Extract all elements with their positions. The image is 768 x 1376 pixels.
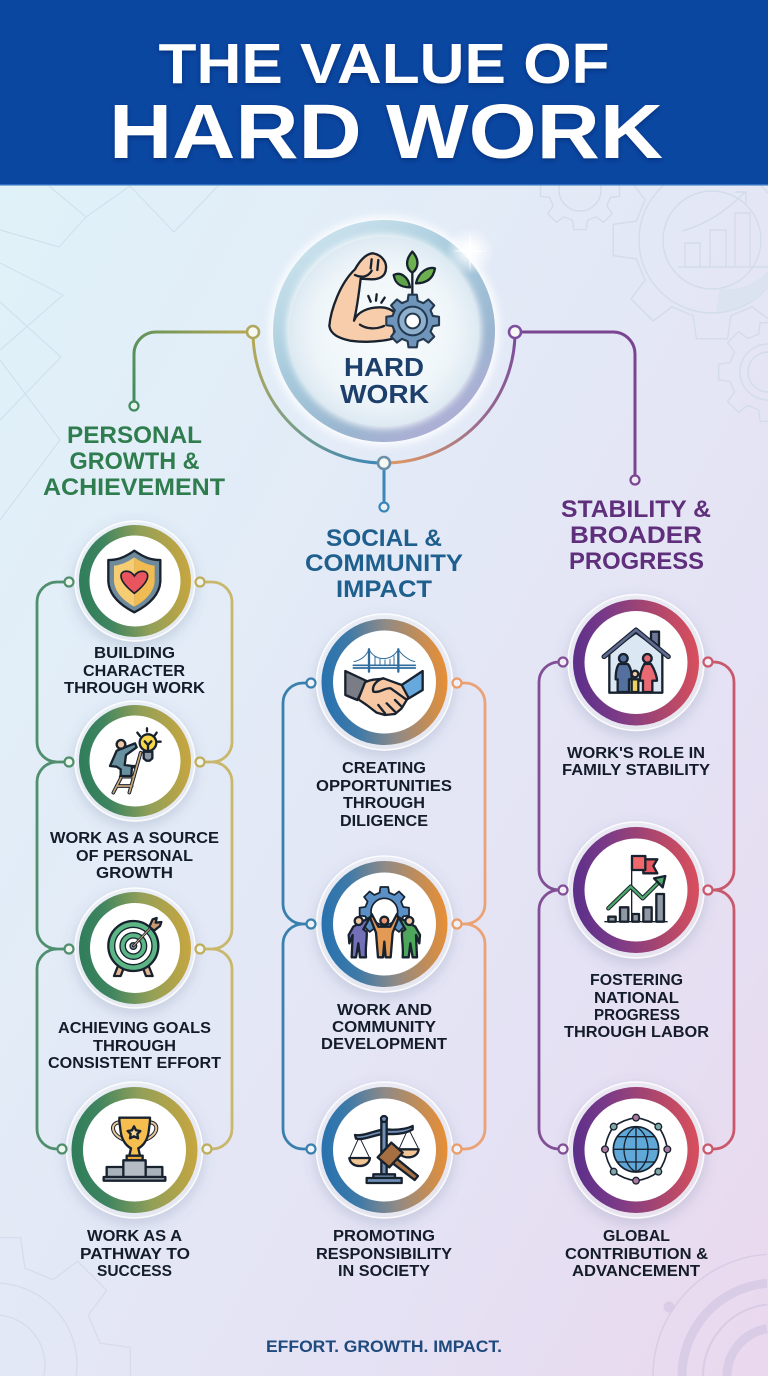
icon: networked globe [602,1114,671,1184]
hub label [340,354,430,409]
connector: right rail [200,582,232,1149]
rail nodes [558,658,712,1154]
heading: personal growth: ACHIEVEMENT [43,474,225,501]
connector: right rail [708,662,734,1149]
rail nodes [58,578,212,1154]
panel: stability and broader progress [539,496,734,1280]
panel: personal growth and achievement [37,422,232,1280]
central hub: hard work [269,216,499,446]
footer tagline: EFFORT. GROWTH. IMPACT. [266,1338,502,1356]
label: family stability: FAMILY STABILITY [562,762,710,779]
label: personal growth [50,830,219,882]
label: global contribution: GLOBAL [603,1228,670,1245]
step: pathway to success [66,1082,202,1280]
label: national progress [564,972,709,1041]
label: global contribution [565,1228,708,1280]
label: pathway to success: WORK AS A [87,1228,182,1245]
hub connectors [134,332,635,507]
label: national progress: PROGRESS [594,1007,680,1024]
label: promoting responsibility: IN SOCIETY [338,1263,430,1280]
label: global contribution: CONTRIBUTION & [565,1246,708,1263]
heading: social and community [305,525,463,603]
rail nodes [306,678,462,1154]
label: building character: THROUGH WORK [64,680,205,697]
icon: flexed arm with gear and sprout [329,252,439,347]
label: building character [64,645,205,697]
step: achieving goals [48,888,221,1072]
label: promoting responsibility [316,1228,452,1280]
label: pathway to success: PATHWAY TO [80,1246,190,1263]
heading: stability and progress: BROADER [570,522,702,549]
hub connector nodes [130,326,640,512]
label: personal growth: WORK AS A SOURCE [50,830,219,847]
heading: social and community: COMMUNITY [305,550,463,577]
connector: left rail [539,662,563,1149]
label: national progress: FOSTERING [590,972,683,989]
label: personal growth: GROWTH [96,865,173,882]
icon: trophy on podium [104,1118,165,1181]
step: building character [64,521,205,697]
label: pathway to success: SUCCESS [97,1263,172,1280]
label: achieving goals: ACHIEVING GOALS [58,1020,211,1037]
step: creating opportunities [316,614,452,830]
label: pathway to success [80,1228,190,1280]
heading: social and community: IMPACT [336,576,432,603]
heading: social and community: SOCIAL & [326,525,442,552]
icon: people lifting a gear [349,887,420,957]
title text: THE VALUE OF [158,32,610,96]
step: promoting responsibility [316,1082,452,1280]
connector: left rail [37,582,69,1149]
label: creating opportunities: THROUGH [343,795,425,812]
label: family stability: WORK'S ROLE IN [567,745,705,762]
step: national progress [564,822,709,1041]
panel: social and community impact [283,525,485,1280]
label: creating opportunities [316,760,452,830]
label: national progress: THROUGH LABOR [564,1024,709,1041]
heading: personal growth: PERSONAL [67,422,202,449]
heading: stability and progress: PROGRESS [569,548,704,575]
label: creating opportunities: OPPORTUNITIES [316,778,452,795]
icon: shield with heart [108,551,160,612]
label: building character: BUILDING [94,645,175,662]
hub label: HARD [344,354,424,382]
label: family stability [562,745,710,779]
icon: bridge and handshake [345,649,423,715]
label: creating opportunities: DILIGENCE [340,813,428,830]
title text: HARD WORK [109,89,663,175]
title text [109,32,663,175]
heading: personal growth: GROWTH & [70,448,200,475]
title banner [0,0,768,186]
sparkle highlight [446,227,494,275]
label: creating opportunities: CREATING [342,760,426,777]
step: personal growth [50,701,219,882]
hub label: WORK [340,381,430,409]
heading: personal growth [43,422,225,501]
label: achieving goals: THROUGH [93,1038,176,1055]
label: promoting responsibility: RESPONSIBILITY [316,1246,452,1263]
icon: target and arrow [108,918,161,976]
heading: stability and progress [561,496,711,575]
heading: stability and progress: STABILITY & [561,496,711,523]
label: community development [321,1002,447,1053]
icon: flag and rising chart [604,855,668,922]
label: building character: CHARACTER [83,663,185,680]
label: global contribution: ADVANCEMENT [572,1263,700,1280]
step: family stability [562,594,710,779]
label: achieving goals [48,1020,221,1072]
icon: scales of justice and gavel [349,1116,419,1183]
label: promoting responsibility: PROMOTING [333,1228,435,1245]
icon: ladder and light bulb [110,728,161,793]
label: community development: COMMUNITY [332,1019,436,1036]
connector: left rail [283,683,311,1149]
label: achieving goals: CONSISTENT EFFORT [48,1055,221,1072]
icon: house and family [604,630,668,693]
connector: right rail [457,683,485,1149]
step: global contribution [565,1082,708,1280]
label: national progress: NATIONAL [594,990,679,1007]
label: community development: WORK AND [337,1002,432,1019]
label: personal growth: OF PERSONAL [76,848,193,865]
label: community development: DEVELOPMENT [321,1036,447,1053]
step: community development [316,856,452,1053]
